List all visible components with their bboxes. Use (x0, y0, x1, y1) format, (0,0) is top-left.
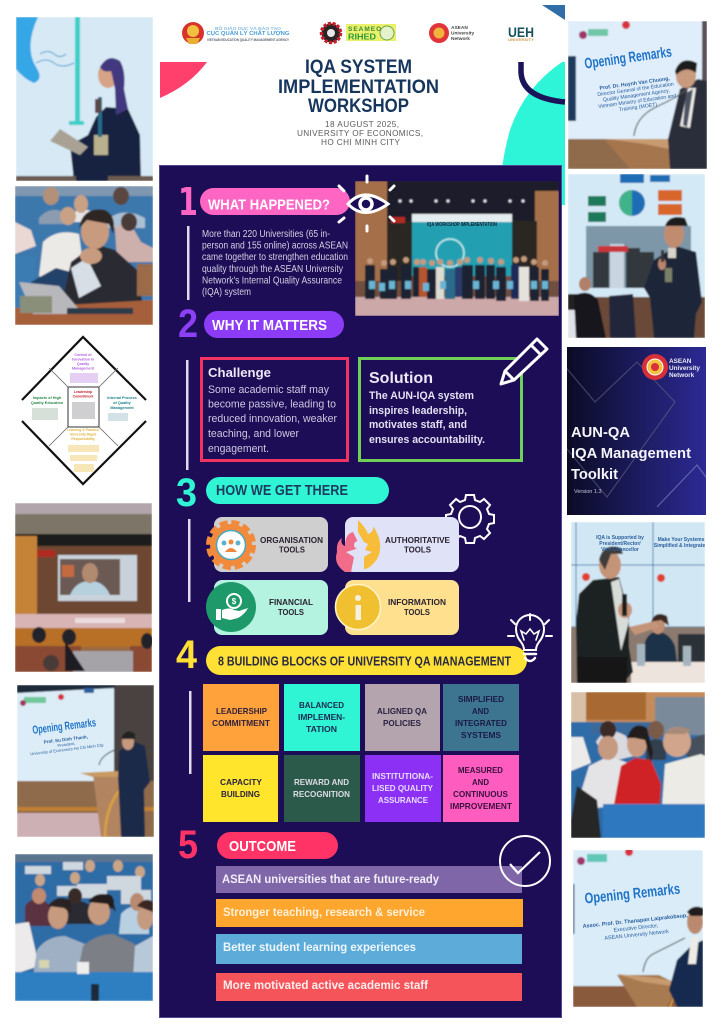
building block: reward and recognition: RECOGNITION (293, 789, 350, 799)
photo: audience woman in red jacket (571, 692, 705, 838)
diagram label: leadership: Commitment (73, 394, 94, 398)
section 2 number: 2 (178, 302, 198, 346)
logo: ASEAN University Network header: ASEAN (451, 25, 468, 31)
card: organisation tools: TOOLS (279, 546, 305, 554)
diagram label: internal process: Internal Process (107, 396, 137, 400)
card: financial tools: TOOLS (278, 608, 304, 617)
section 5 heading pill: outcome (217, 832, 338, 859)
diagram label: learning and practice: Learning & Practice (67, 428, 99, 432)
icon: eye (339, 176, 394, 231)
building block: reward and recognition (284, 755, 360, 822)
photo: speaker with microphone: Simplified & Integrated (654, 543, 708, 549)
building block: leadership commitment: COMMITMENT (212, 718, 271, 728)
diagram label: impacts: Impacts of High (33, 396, 62, 400)
toolkit title: Toolkit (571, 467, 618, 483)
section 4 number: 4 (176, 633, 198, 677)
diagram label: control of innovation: Management (72, 366, 95, 370)
toolkit title: IQA Management (571, 446, 691, 462)
diagram label: learning and practice (67, 428, 99, 472)
building block: aligned QA policies: ALIGNED QA (377, 706, 427, 716)
text: opening remarks slide: Prof. Dr. Huynh Van Chuong, (599, 76, 671, 92)
photo: speaker with microphone: IQA is Supported by (596, 535, 644, 541)
toolkit title (571, 425, 691, 495)
panel: solution: motivates staff, and (369, 419, 467, 431)
diagram label: impacts: Quality Education (31, 401, 64, 405)
panel: solution: ensures accountability. (369, 434, 485, 446)
outcome bar: student learning: Better student learning experiences (223, 940, 416, 954)
building block: simplified and integrated systems (443, 684, 519, 751)
building block: aligned QA policies: POLICIES (383, 718, 421, 728)
text: what happened description (202, 229, 348, 298)
diagram label: leadership (72, 390, 95, 419)
logo: ASEAN University Network: University (669, 365, 700, 372)
text: opening remarks slide: University of Economics Ho Chi Minh City (30, 742, 104, 756)
title: WORKSHOP (308, 95, 409, 117)
toolkit title: AUN-QA (571, 425, 631, 441)
diagram label: internal process (107, 396, 137, 421)
panel: challenge: Some academic staff may (208, 384, 330, 396)
building block: balanced implementation: TATION (306, 724, 337, 734)
section 2 heading pill: why it matters: WHY IT MATTERS (212, 317, 327, 334)
panel: solution: inspires leadership, (369, 405, 467, 417)
building block: reward and recognition: REWARD AND (294, 777, 349, 787)
icon: check circle (500, 836, 550, 886)
text: opening remarks slide: Training (MOET) (619, 102, 658, 113)
photo: woman speaker with tablet (16, 17, 153, 181)
card: organisation tools (208, 517, 328, 572)
logo: SEAMEO RIHED: SEAMEO (348, 26, 382, 33)
text: opening remarks slide (27, 717, 104, 756)
logo: SEAMEO RIHED: RIHED (348, 32, 376, 42)
icon: white gear (446, 495, 494, 543)
card: financial tools: $ (232, 597, 237, 606)
logo: ASEAN University Network header: Network (451, 36, 470, 42)
card: information tools: TOOLS (404, 608, 430, 617)
text: what happened description: More than 220 Universities (65 in- (202, 229, 330, 240)
text: what happened description: quality through the ASEAN University (202, 264, 343, 275)
diagram label: impacts (31, 396, 64, 420)
card: authoritative tools (336, 517, 459, 572)
logo: Vietnam Quality Management Agency: BỘ GIÁO DỤC VÀ ĐÀO TẠO (215, 24, 281, 32)
diagram label: control of innovation: Control of (74, 353, 92, 357)
logo: ASEAN University Network header (429, 23, 475, 43)
outcome bar: teaching: Stronger teaching, research & service (223, 905, 425, 919)
card: information tools (336, 580, 459, 635)
logo: ASEAN University Network header: University (451, 30, 475, 36)
text: opening remarks slide: President, (57, 741, 76, 748)
building block: measured and continuous improvement: AND (472, 777, 489, 787)
text: opening remarks slide: Prof. Su Dinh Thanh, (43, 734, 88, 745)
building block: aligned QA policies (365, 684, 440, 751)
photo: opening remarks, Prof. Huynh Van Chuong (568, 21, 707, 169)
logo: ASEAN University Network: Network (669, 372, 695, 379)
date and venue (297, 120, 423, 147)
logo: UEH: UEH (508, 25, 534, 40)
building block: simplified and integrated systems: SIMPLIFIED (458, 694, 504, 704)
logo: Vietnam Quality Management Agency: VIETNAM EDUCATION QUALITY MANAGEMENT AGENCY (207, 37, 289, 42)
building block: simplified and integrated systems: INTEGRATED (455, 718, 507, 728)
building block: institutionalised quality assurance: INSTITUTIONA- (372, 771, 433, 781)
toolkit title: Version 1.3 (574, 489, 602, 495)
section 5 heading pill: outcome: OUTCOME (229, 838, 296, 855)
logo: ASEAN University Network (642, 354, 700, 380)
building block: balanced implementation: BALANCED (299, 700, 344, 710)
photo: group on stage (355, 181, 559, 316)
building block: measured and continuous improvement: IMPROVEMENT (450, 801, 513, 811)
logo: ASEAN University Network: ASEAN (669, 358, 692, 365)
icon: pencil (501, 339, 547, 384)
section 1 heading pill: what happened: WHAT HAPPENED? (208, 196, 330, 214)
section 3 heading pill: how we get there: HOW WE GET THERE (216, 482, 348, 499)
photo: speaker with microphone: Vice-Chancellor (601, 547, 639, 553)
text: what happened description: (IQA) system (202, 287, 251, 298)
diagram: diamond of quality management (22, 337, 146, 484)
text: opening remarks slide: ASEAN University Network (604, 929, 669, 942)
text: what happened description: person and 155 online) across ASEAN (202, 240, 348, 252)
diagram label: learning and practice: University Rapid (70, 432, 96, 436)
outcome bar: motivated staff (216, 973, 522, 1001)
icon: light bulb (508, 614, 552, 661)
logo: SEAMEO RIHED (322, 24, 396, 42)
photo: opening remarks, president at podium (17, 685, 154, 837)
diagram label: control of innovation: Quality (77, 362, 89, 366)
photo: audience rows in blue seats (15, 854, 153, 1001)
diagram label: leadership: Leadership (74, 390, 92, 394)
decorative shape: top right blue corner (542, 5, 565, 20)
section 5 number: 5 (178, 823, 198, 867)
section 4 heading pill: building blocks (206, 646, 527, 675)
building block: institutionalised quality assurance (365, 755, 441, 822)
date and venue: 18 AUGUST 2025, (325, 120, 399, 129)
logo: Vietnam Quality Management Agency (182, 22, 290, 44)
building block: measured and continuous improvement: CONTINUOUS (453, 789, 508, 799)
panel: challenge: teaching, and lower (208, 428, 299, 440)
card: authoritative tools: AUTHORITATIVE (385, 536, 451, 545)
card: financial tools (206, 580, 328, 635)
photo: video call on stage screen (15, 503, 153, 672)
diagram label: control of innovation (70, 353, 98, 383)
building block: simplified and integrated systems: SYSTEMS (461, 730, 501, 740)
photo: opening remarks, Assoc. Prof. Dr. Thanapan Laiprakobsup (573, 848, 703, 1007)
card: information tools: INFORMATION (388, 598, 446, 607)
text: opening remarks slide: Assoc. Prof. Dr. Thanapan Laiprakobsup, (582, 913, 688, 930)
text: opening remarks slide (583, 43, 679, 117)
text: opening remarks slide (579, 880, 690, 944)
main panel (160, 166, 562, 1018)
panel: challenge: reduced innovation, weaker (208, 413, 337, 425)
logo: Vietnam Quality Management Agency: CỤC QUẢN LÝ CHẤT LƯỢNG (206, 30, 290, 37)
logo: UEH: UNIVERSITY (508, 38, 535, 42)
panel: challenge: Challenge (208, 365, 271, 380)
building block: leadership commitment: LEADERSHIP (216, 706, 267, 716)
card: financial tools: FINANCIAL (269, 598, 313, 607)
card: authoritative tools: TOOLS (404, 546, 432, 554)
building block: simplified and integrated systems: AND (472, 706, 489, 716)
building block: balanced implementation (284, 684, 360, 751)
header shape: teal arc (499, 62, 565, 205)
title (278, 56, 439, 117)
section 1 number: 1 (178, 180, 198, 224)
diagram label: internal process: Management (110, 406, 134, 410)
building block: institutionalised quality assurance: LISED QUALITY (372, 783, 433, 793)
panel: challenge: become passive, leading to (208, 398, 336, 410)
text: opening remarks slide: Vietnam Ministry of Education and (598, 93, 677, 110)
text: opening remarks slide: Executive Director, (613, 923, 659, 934)
text: slide title in photo: IQA WORKSHOP IMPLEMENTATION (427, 222, 497, 228)
outcome bar: teaching (216, 899, 523, 927)
diagram label: control of innovation: Innovation in (72, 358, 94, 362)
photo: speaker with microphone: Make Your Systems (658, 537, 705, 543)
text: opening remarks slide: Director General of the Education (597, 81, 674, 98)
photo: speaker with microphone (571, 522, 708, 683)
diagram label: internal process: of Quality (113, 401, 132, 405)
card: organisation tools: ORGANISATION (260, 536, 323, 545)
panel: challenge (202, 358, 348, 460)
photo: seated man at laptop (15, 186, 153, 325)
section 1 heading pill: what happened (200, 188, 350, 215)
panel: solution: The AUN-IQA system (369, 390, 474, 402)
text: what happened description: Network's Internal Quality Assurance (202, 276, 342, 286)
outcome bar: student learning (216, 934, 522, 964)
diagram label: learning and practice: Responsibility (71, 437, 95, 441)
panel: solution (360, 358, 522, 460)
building block: capacity building (203, 755, 278, 822)
photo: speaker in front of slide with chart (568, 174, 705, 338)
building block: measured and continuous improvement (443, 755, 519, 822)
header shape: pink wedge (160, 62, 207, 98)
section 4 heading pill: building blocks: 8 BUILDING BLOCKS OF UNIVERSITY QA MANAGEMENT (218, 654, 511, 668)
panel: challenge: engagement. (208, 443, 269, 455)
building block: balanced implementation: IMPLEMEN- (298, 712, 345, 722)
building block: institutionalised quality assurance: ASSURANCE (378, 795, 428, 805)
building block: capacity building: BUILDING (221, 789, 260, 799)
header shape: navy curve (521, 62, 565, 102)
photo: speaker with microphone: President/Rector/ (599, 541, 641, 547)
building block: leadership commitment (203, 684, 279, 751)
text: what happened description: came together to strengthen education (202, 252, 348, 263)
outcome bar: future-ready (216, 866, 522, 893)
title: IQA SYSTEM (305, 56, 412, 78)
panel: solution: Solution (369, 370, 433, 387)
text: opening remarks slide: Opening Remarks (32, 717, 97, 737)
outcome bar: future-ready: ASEAN universities that are future-ready (222, 872, 439, 886)
section 2 heading pill: why it matters (204, 311, 344, 338)
text: opening remarks slide: Quality Management Agency, (603, 88, 670, 103)
toolkit cover: AUN-QA IQA Management Toolkit (557, 347, 724, 515)
section 3 number: 3 (176, 471, 197, 515)
outcome bar: motivated staff: More motivated active academic staff (223, 978, 429, 992)
date and venue: UNIVERSITY OF ECONOMICS, (297, 129, 423, 138)
date and venue: HO CHI MINH CITY (321, 138, 401, 147)
section 3 heading pill: how we get there (206, 477, 389, 504)
title: IMPLEMENTATION (278, 76, 439, 98)
building block: capacity building: CAPACITY (220, 777, 262, 787)
building block: measured and continuous improvement: MEASURED (458, 765, 503, 775)
